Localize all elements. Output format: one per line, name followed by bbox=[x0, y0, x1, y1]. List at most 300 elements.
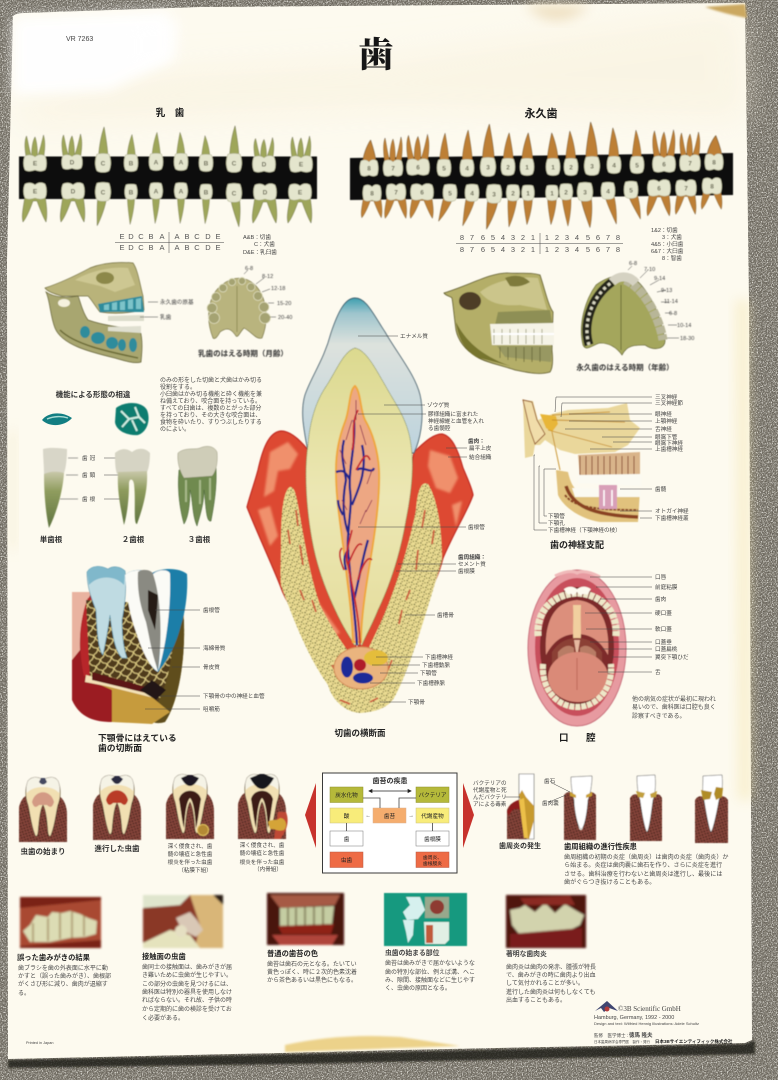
permanent teeth notation table: 8 bbox=[460, 245, 464, 254]
photo 2: interproximal caries: き難いために虫歯が生じやすい。 bbox=[142, 971, 232, 979]
flow box: dental plaque diseases: ← bbox=[365, 813, 371, 819]
arrow: right red bbox=[463, 783, 474, 848]
box: metabolites: 代謝産物 bbox=[421, 812, 444, 820]
molars in mandible section: 咀嚼筋 bbox=[203, 705, 220, 713]
heading: permanent teeth: 永久歯 bbox=[524, 106, 558, 120]
permanent teeth notation table: 2 bbox=[521, 233, 525, 242]
permanent teeth notation table: 2 bbox=[555, 233, 559, 242]
text: tooth function description: を持っており、その大きな咬合面は、 bbox=[160, 411, 261, 419]
labels: tooth parts: 歯根 bbox=[82, 495, 97, 503]
permanent teeth notation table: 1 bbox=[545, 245, 549, 254]
onset of periodontitis: んだバクテリ bbox=[473, 794, 507, 801]
oral cavity: 診察すべきである。 bbox=[632, 712, 686, 720]
box: plaque: 歯苔 bbox=[384, 812, 395, 820]
labels: tooth parts: 歯頸 bbox=[82, 471, 97, 479]
permanent teeth notation table: 3：犬歯 bbox=[662, 233, 682, 241]
central incisor cross-section: エナメル質 bbox=[400, 332, 428, 340]
primary teeth notation table: C bbox=[138, 243, 144, 252]
printed in Japan: Printed in Japan bbox=[26, 1041, 53, 1045]
permanent teeth notation table: 3 bbox=[565, 245, 569, 254]
child skull with tooth germs: 永久歯の原基 bbox=[160, 298, 194, 306]
photo 4: caries sites: 虫歯の始まる部位 bbox=[385, 948, 440, 957]
text: tooth function description: のみの形をした切歯と犬歯はかみ切る bbox=[160, 376, 262, 384]
captions: root counts: 単歯根 bbox=[40, 534, 63, 544]
permanent teeth notation table: 5 bbox=[586, 245, 590, 254]
text: tooth function description: のによい。 bbox=[160, 426, 190, 433]
box: periodontitis bbox=[416, 852, 449, 868]
two root tooth bbox=[115, 449, 150, 525]
text: tooth function description: 小臼歯はかみ切る機能と砕く機能を兼 bbox=[160, 390, 262, 398]
permanent teeth chart: 2 bbox=[564, 190, 568, 196]
adult skull bbox=[444, 273, 554, 373]
box: carbohydrates: 炭水化物 bbox=[335, 791, 358, 799]
primary teeth notation table: D bbox=[128, 243, 134, 252]
single root tooth bbox=[43, 448, 78, 528]
central incisor cross-section: ゾウゲ質 bbox=[427, 401, 450, 409]
permanent teeth chart: 7 bbox=[394, 190, 398, 196]
photo 3: plaque colour bbox=[267, 893, 357, 984]
permanent teeth chart: 7 bbox=[684, 186, 688, 192]
photo 5: severe gingivitis: 著明な歯肉炎 bbox=[506, 949, 547, 958]
molars in mandible section: 下顎骨にはえている bbox=[98, 733, 177, 743]
onset of periodontitis bbox=[473, 774, 541, 850]
primary palate with eruption ages: 15-20 bbox=[277, 301, 291, 307]
central incisor cross-section: る歯髄腔 bbox=[428, 424, 451, 432]
permanent teeth notation table: 5 bbox=[491, 245, 495, 254]
photo 1: wrong brushing: 歯ブラシを歯の外表面に水平に動 bbox=[18, 964, 108, 972]
caries stage 4: 髄の壊疽と急性歯 bbox=[240, 849, 285, 857]
photo 3: plaque colour: 歯苔は歯石の元となる。たいてい bbox=[267, 960, 357, 968]
publisher block: Design and text: Wilfried Hennig Illustrations: Adele Schultz bbox=[594, 1021, 699, 1026]
central incisor cross-section: 神経線維と血管を入れ bbox=[428, 417, 484, 425]
gum right bbox=[358, 434, 473, 650]
central incisor cross-section: 下顎骨 bbox=[408, 699, 425, 706]
permanent teeth chart: 4 bbox=[465, 166, 469, 172]
oral cavity: 軟口蓋 bbox=[655, 625, 672, 633]
photo 1: wrong brushing: る。 bbox=[18, 990, 30, 997]
primary teeth notation table: B bbox=[184, 243, 190, 252]
caries stage 3: （粘膜下組） bbox=[178, 866, 212, 874]
permanent teeth notation table: 6 bbox=[596, 233, 600, 242]
photo 2: interproximal caries: 接触面の虫歯 bbox=[142, 952, 186, 961]
primary teeth chart: B bbox=[204, 160, 209, 168]
oral cavity: 易いので、歯科医は口腔も良く bbox=[632, 703, 716, 711]
photo 3: plaque colour: 普通の歯苔の色 bbox=[267, 949, 319, 958]
nerve supply diagram: 下顎管 bbox=[548, 512, 565, 520]
enamel bbox=[303, 298, 422, 453]
primary teeth notation table: B bbox=[184, 232, 190, 241]
function and form section: 機能による形態の相違 bbox=[56, 389, 131, 399]
box: caries: 虫歯 bbox=[341, 856, 352, 864]
primary teeth chart bbox=[19, 126, 317, 227]
permanent palate with eruption ages: 9-13 bbox=[661, 288, 672, 294]
molars in mandible section: 下顎骨の中の神経と血管 bbox=[203, 692, 265, 700]
permanent teeth notation table: 1 bbox=[531, 233, 535, 242]
photo 5: severe gingivitis bbox=[506, 895, 596, 1004]
central incisor cross-section: 下歯槽静脈 bbox=[417, 679, 445, 687]
oral cavity: 前庭粘膜 bbox=[655, 583, 678, 591]
periodontal progression: stage 1: 歯肉嚢 bbox=[542, 799, 559, 807]
text: periodontal progression: ら始まる。炎症は歯肉嚢に歯石を作り、さらに炎症を進行 bbox=[564, 861, 722, 869]
icon: 3B logo bbox=[595, 1001, 618, 1012]
primary teeth notation table bbox=[115, 232, 277, 256]
photo 3: plaque colour: から茶色あるいは黒色にもなる。 bbox=[267, 976, 357, 984]
permanent teeth notation table: 4 bbox=[501, 233, 505, 242]
primary teeth notation table: D bbox=[205, 243, 211, 252]
dentine bbox=[306, 348, 412, 645]
primary teeth chart: D bbox=[263, 190, 268, 196]
oral cavity bbox=[528, 570, 716, 744]
photo 5: severe gingivitis: 進行した歯肉炎は何もしなくても bbox=[506, 988, 596, 996]
central incisor cross-section: 歯周組織： bbox=[458, 553, 486, 561]
publisher block: 日本歯周病学会専門医 製作・発行 bbox=[594, 1039, 650, 1044]
nerve supply diagram: 三叉神経 bbox=[655, 393, 678, 401]
child skull with tooth germs bbox=[45, 263, 194, 363]
photo 5: severe gingivitis: で、歯みがきの時に歯肉より出血 bbox=[506, 971, 596, 979]
permanent palate with eruption ages: 11-14 bbox=[664, 299, 678, 305]
primary teeth chart: C bbox=[101, 190, 106, 196]
permanent teeth chart: 1 bbox=[550, 190, 554, 198]
central incisor cross-section bbox=[247, 298, 492, 738]
text: periodontal progression: 歯周組織の進行性疾患 bbox=[564, 842, 638, 851]
permanent teeth notation table: 3 bbox=[565, 233, 569, 242]
primary palate with eruption ages: 8-12 bbox=[262, 274, 273, 280]
permanent teeth chart: 6 bbox=[416, 164, 420, 172]
text: periodontal progression bbox=[564, 842, 729, 886]
primary teeth notation table: E bbox=[215, 232, 221, 241]
permanent teeth notation table: 7 bbox=[606, 245, 610, 254]
primary teeth notation table: E bbox=[215, 243, 221, 252]
primary palate with eruption ages: 乳歯のはえる時期（月齢） bbox=[198, 348, 288, 358]
permanent teeth chart: 8 bbox=[367, 166, 371, 172]
onset of periodontitis: アによる毒素 bbox=[473, 800, 507, 808]
permanent teeth notation table: 3 bbox=[511, 233, 515, 242]
nerve supply diagram bbox=[523, 393, 689, 550]
permanent palate with eruption ages: 6-8 bbox=[629, 261, 637, 267]
primary teeth chart: E bbox=[298, 190, 303, 196]
box: periodontal membrane: 歯根膜 bbox=[424, 835, 441, 843]
flow box: dental plaque diseases: → bbox=[408, 813, 414, 819]
photo 2: interproximal caries: く必要がある。 bbox=[142, 1014, 184, 1022]
photo 2: interproximal caries: この部分の虫歯を見つけるには、 bbox=[142, 980, 232, 988]
caries stage 3: 根炎を伴った虫歯 bbox=[168, 858, 213, 866]
nerve supply diagram: 舌神経 bbox=[655, 425, 672, 433]
permanent teeth chart: 8 bbox=[712, 160, 716, 166]
photo 2: interproximal caries: 歯同士の接触面は、歯みがきが届 bbox=[142, 963, 232, 971]
caries stage 2: 進行した虫歯 bbox=[94, 843, 140, 853]
primary teeth chart: C bbox=[232, 190, 237, 198]
caries stage 4 bbox=[238, 774, 288, 873]
text: periodontal progression: 歯周組織の初期の炎症（歯周炎）は歯肉の炎症（歯肉炎）か bbox=[564, 853, 729, 861]
primary palate with eruption ages: 6-8 bbox=[245, 266, 253, 272]
permanent teeth notation table: 1&2：切歯 bbox=[651, 226, 678, 234]
publisher block: ©3B Scientific GmbH bbox=[618, 1005, 681, 1013]
photo 2: interproximal caries bbox=[142, 895, 232, 1022]
caries stage 4: 深く侵食され、歯 bbox=[240, 841, 285, 849]
oral cavity: 他の病気の症状が最初に現われ bbox=[632, 695, 716, 703]
permanent teeth notation table: 5 bbox=[586, 233, 590, 242]
photo 1: wrong brushing: かすと（誤った歯みがき）、歯根部 bbox=[18, 972, 111, 980]
permanent teeth notation table: 4 bbox=[575, 233, 579, 242]
primary teeth chart: C bbox=[101, 160, 106, 168]
permanent teeth chart: 4 bbox=[606, 188, 610, 196]
permanent teeth notation table bbox=[456, 226, 684, 262]
permanent teeth chart: 3 bbox=[486, 164, 490, 172]
nerve supply diagram: 眼神経 bbox=[655, 410, 672, 418]
permanent teeth chart: 2 bbox=[506, 164, 510, 172]
permanent teeth chart: 6 bbox=[662, 162, 666, 168]
primary teeth notation table: B bbox=[148, 243, 154, 252]
permanent teeth notation table: 2 bbox=[521, 245, 525, 254]
molars in mandible section: 海綿骨質 bbox=[203, 644, 226, 652]
primary teeth chart: A bbox=[154, 160, 159, 166]
central incisor cross-section: セメント質 bbox=[458, 560, 486, 568]
primary teeth chart: D bbox=[70, 160, 75, 166]
permanent teeth notation table: 6 bbox=[481, 233, 485, 242]
permanent palate with eruption ages: 9-14 bbox=[654, 276, 665, 282]
molars in mandible section: 骨皮質 bbox=[203, 663, 220, 671]
permanent teeth chart: 4 bbox=[612, 162, 616, 170]
permanent teeth notation table: 4 bbox=[575, 245, 579, 254]
periodontal progression: stage 1 bbox=[542, 776, 596, 840]
central incisor cross-section: 下顎管 bbox=[420, 669, 437, 677]
nerve supply diagram: 三叉神経節 bbox=[655, 399, 683, 407]
primary teeth chart: E bbox=[33, 160, 38, 168]
periodontal progression: stage 1: 歯石 bbox=[544, 777, 556, 785]
permanent teeth chart: 6 bbox=[420, 190, 424, 196]
central incisor cross-section: 歯槽骨 bbox=[437, 611, 454, 619]
box: tooth: 歯 bbox=[344, 835, 350, 843]
function and form section bbox=[42, 389, 131, 425]
primary teeth chart: E bbox=[33, 188, 38, 196]
icon: molar occlusal surface bbox=[115, 403, 149, 435]
permanent teeth notation table: 1 bbox=[545, 233, 549, 242]
central incisor cross-section: 下歯槽動脈 bbox=[422, 661, 450, 669]
permanent teeth chart: 2 bbox=[569, 164, 573, 172]
caries stage 3 bbox=[166, 774, 214, 874]
captions: root counts: ３歯根 bbox=[188, 534, 211, 544]
permanent teeth chart: 1 bbox=[551, 164, 555, 172]
title: 歯 bbox=[358, 36, 394, 75]
primary teeth chart: D bbox=[262, 162, 267, 168]
molars in mandible section bbox=[72, 566, 265, 753]
primary teeth chart: B bbox=[204, 190, 209, 196]
publisher block: 日本3Bサイエンティフィック株式会社 bbox=[655, 1038, 733, 1045]
permanent palate with eruption ages: 永久歯のはえる時期（年齢） bbox=[576, 362, 674, 372]
permanent teeth chart: 3 bbox=[590, 164, 594, 170]
onset of periodontitis: 代謝産物と死 bbox=[473, 786, 507, 794]
caries stage 3: 深く侵食され、歯 bbox=[168, 842, 213, 850]
molars in mandible section: 歯根管 bbox=[203, 606, 220, 614]
central incisor cross-section: 結合組織 bbox=[469, 453, 492, 461]
primary teeth notation table: C bbox=[138, 232, 144, 241]
photo 1: wrong brushing bbox=[17, 897, 111, 997]
text: tooth function description bbox=[160, 376, 262, 433]
oral cavity: 口蓋扁桃 bbox=[655, 645, 678, 653]
code: VR 7263 bbox=[66, 36, 93, 43]
primary teeth chart: E bbox=[299, 162, 304, 168]
child skull with tooth germs: 乳歯 bbox=[160, 313, 172, 321]
primary teeth notation table: A bbox=[174, 243, 180, 252]
permanent teeth chart: 1 bbox=[526, 190, 530, 198]
text: tooth function description: すべての臼歯は、複数のとがった部分 bbox=[160, 404, 261, 412]
primary teeth chart: C bbox=[232, 160, 237, 168]
permanent teeth chart: 5 bbox=[448, 190, 452, 198]
photo 2: interproximal caries: 歯科医は特別の器具を使用しなけ bbox=[142, 988, 232, 996]
permanent teeth notation table: 2 bbox=[555, 245, 559, 254]
caries stage 1 bbox=[19, 777, 67, 856]
permanent teeth chart: 8 bbox=[710, 184, 714, 190]
photo 2: interproximal caries: から定期的に歯の検診を受けてお bbox=[142, 1005, 232, 1013]
central incisor cross-section: 扁平上皮 bbox=[469, 444, 492, 452]
primary teeth chart: A bbox=[179, 188, 184, 196]
publisher block bbox=[594, 1001, 733, 1045]
primary teeth chart: A bbox=[154, 188, 159, 196]
central incisor cross-section: 切歯の横断面 bbox=[334, 728, 386, 738]
central incisor cross-section: 膠様組織に富まれた bbox=[428, 410, 479, 418]
primary teeth notation table: C bbox=[194, 232, 200, 241]
permanent teeth notation table: 6 bbox=[481, 245, 485, 254]
primary teeth chart: D bbox=[71, 188, 76, 196]
primary teeth chart: A bbox=[179, 160, 184, 166]
photo 1: wrong brushing: 誤った歯みがきの結果 bbox=[17, 953, 91, 962]
neurovascular bundle bbox=[334, 647, 388, 689]
permanent teeth chart: 8 bbox=[370, 190, 374, 198]
labels: tooth parts: 歯冠 bbox=[82, 454, 97, 462]
three root tooth bbox=[178, 446, 217, 526]
captions: root counts bbox=[40, 534, 211, 544]
periodontal progression: stage 3 bbox=[695, 775, 728, 843]
arrow: left red bbox=[305, 783, 316, 848]
permanent palate with eruption ages: 10-14 bbox=[677, 323, 691, 329]
primary teeth notation table: E bbox=[119, 243, 125, 252]
nerve supply diagram: 歯の神経支配 bbox=[550, 539, 604, 550]
permanent teeth notation table: 5 bbox=[491, 233, 495, 242]
nerve supply diagram: 上歯槽神経 bbox=[655, 445, 683, 453]
primary teeth notation table: A bbox=[159, 243, 165, 252]
captions: root counts: ２歯根 bbox=[122, 534, 145, 544]
permanent teeth notation table: 4&5：小臼歯 bbox=[651, 240, 684, 248]
gum left bbox=[247, 431, 356, 650]
primary teeth notation table: D bbox=[128, 232, 134, 241]
box: periodontitis: 歯根膜炎 bbox=[423, 860, 442, 867]
permanent teeth notation table: 3 bbox=[511, 245, 515, 254]
permanent teeth chart: 7 bbox=[688, 160, 692, 168]
caries stage 4: 根炎を伴った虫歯 bbox=[240, 858, 285, 866]
caries stage 1: 虫歯の始まり bbox=[20, 846, 66, 856]
primary teeth notation table: B bbox=[148, 232, 154, 241]
primary teeth notation table: A&B：切歯 bbox=[243, 233, 271, 241]
central incisor cross-section: 歯肉： bbox=[468, 437, 485, 445]
primary teeth notation table: D&E：乳臼歯 bbox=[243, 248, 277, 256]
nerve supply diagram: オトガイ神経 bbox=[655, 507, 689, 515]
publisher block: 徳馬 隆夫 bbox=[629, 1031, 653, 1039]
central incisor cross-section: 歯根膜 bbox=[458, 567, 475, 575]
photo 4: caries sites: く、虫歯の原因となる。 bbox=[385, 984, 451, 992]
permanent teeth notation table: 8：智歯 bbox=[662, 254, 682, 262]
photo 5: severe gingivitis: して気付かれることが多い。 bbox=[506, 979, 584, 987]
permanent teeth notation table: 4 bbox=[501, 245, 505, 254]
blood vessels and nerves bbox=[336, 420, 374, 645]
photo 5: severe gingivitis: 歯肉炎は歯肉の発赤、腫張が特長 bbox=[506, 963, 596, 971]
permanent teeth notation table: 8 bbox=[616, 245, 620, 254]
primary teeth notation table: A bbox=[159, 232, 165, 241]
box: periodontitis: 歯周炎、 bbox=[423, 854, 442, 861]
nerve supply diagram: 眼窩下管 bbox=[655, 433, 678, 441]
photo 4: caries sites bbox=[384, 893, 475, 992]
onset of periodontitis: バクテリアの bbox=[473, 780, 507, 787]
labels: tooth parts bbox=[82, 454, 122, 503]
permanent teeth notation table: 6&7：大臼歯 bbox=[651, 247, 684, 255]
permanent teeth notation table: 7 bbox=[470, 245, 474, 254]
text: periodontal progression: 歯がぐらつき抜けることもある。 bbox=[564, 878, 655, 886]
text: tooth function description: ね備えており、咬合面を持っている。 bbox=[160, 397, 261, 405]
primary teeth notation table: D bbox=[205, 232, 211, 241]
permanent teeth notation table: 7 bbox=[470, 233, 474, 242]
primary teeth notation table: E bbox=[119, 232, 125, 241]
molars in mandible section: 歯の切断面 bbox=[98, 742, 142, 753]
text: tooth function description: 役割をする。 bbox=[160, 383, 196, 391]
oral cavity: 口唇 bbox=[655, 574, 667, 581]
flow box: dental plaque diseases bbox=[322, 773, 457, 873]
pulp bbox=[336, 386, 379, 642]
nerve supply diagram: 下歯槽神経叢 bbox=[655, 514, 689, 522]
oral cavity: 硬口蓋 bbox=[655, 609, 672, 617]
caries stage 2 bbox=[93, 775, 141, 853]
primary palate with eruption ages: 12-18 bbox=[271, 286, 285, 292]
primary teeth chart: B bbox=[129, 190, 134, 196]
permanent palate with eruption ages: 7-10 bbox=[644, 267, 655, 273]
primary palate with eruption ages: 20-40 bbox=[278, 315, 292, 321]
publisher block: Hamburg, Germany, 1992 - 2000 bbox=[594, 1015, 674, 1021]
photo 3: plaque colour: 黄色っぽく、時に２次的色素沈着 bbox=[267, 968, 357, 976]
central incisor cross-section: 下歯槽神経 bbox=[425, 653, 453, 661]
permanent teeth chart bbox=[350, 122, 733, 230]
permanent teeth chart: 4 bbox=[470, 190, 474, 198]
photo 5: severe gingivitis: 出血することもある。 bbox=[506, 996, 566, 1004]
nerve supply diagram: 歯髄 bbox=[655, 485, 667, 493]
primary teeth chart: B bbox=[129, 160, 134, 168]
permanent teeth chart: 3 bbox=[583, 190, 587, 196]
flow box: dental plaque diseases: 歯苔の疾患 bbox=[372, 776, 408, 785]
permanent teeth chart: 1 bbox=[525, 164, 529, 172]
permanent teeth chart: 6 bbox=[657, 186, 661, 192]
photo 2: interproximal caries: ればならない。それ故、子供の時 bbox=[142, 996, 232, 1004]
permanent teeth notation table: 8 bbox=[616, 233, 620, 242]
primary teeth notation table: C：犬歯 bbox=[254, 240, 275, 248]
primary palate with eruption ages bbox=[198, 266, 292, 358]
periodontal progression: stage 2 bbox=[630, 775, 662, 841]
box: bacteria: バクテリア bbox=[419, 792, 447, 799]
alveolar bone bbox=[281, 483, 442, 713]
oral cavity: 口 bbox=[559, 733, 569, 744]
nerve supply diagram: 下顎孔 bbox=[548, 519, 565, 527]
oral cavity: 舌 bbox=[655, 668, 661, 676]
primary teeth notation table: C bbox=[194, 243, 200, 252]
publisher block: 監修 医学博士： bbox=[594, 1032, 630, 1039]
permanent palate with eruption ages: 6-8 bbox=[669, 311, 677, 317]
nerve supply diagram: 上顎神経 bbox=[655, 417, 678, 425]
oral cavity: 口蓋垂 bbox=[655, 638, 672, 646]
permanent teeth notation table: 1 bbox=[531, 245, 535, 254]
photo 4: caries sites: み、隙間、接触面などに生じやす bbox=[385, 976, 475, 984]
permanent palate with eruption ages: 18-30 bbox=[680, 336, 694, 342]
permanent palate with eruption ages bbox=[576, 261, 694, 372]
icon: incisor edge bbox=[42, 413, 72, 425]
onset of periodontitis: 歯周炎の発生 bbox=[499, 841, 541, 850]
permanent teeth chart: 7 bbox=[391, 166, 395, 172]
oral cavity: 腔 bbox=[586, 732, 596, 744]
